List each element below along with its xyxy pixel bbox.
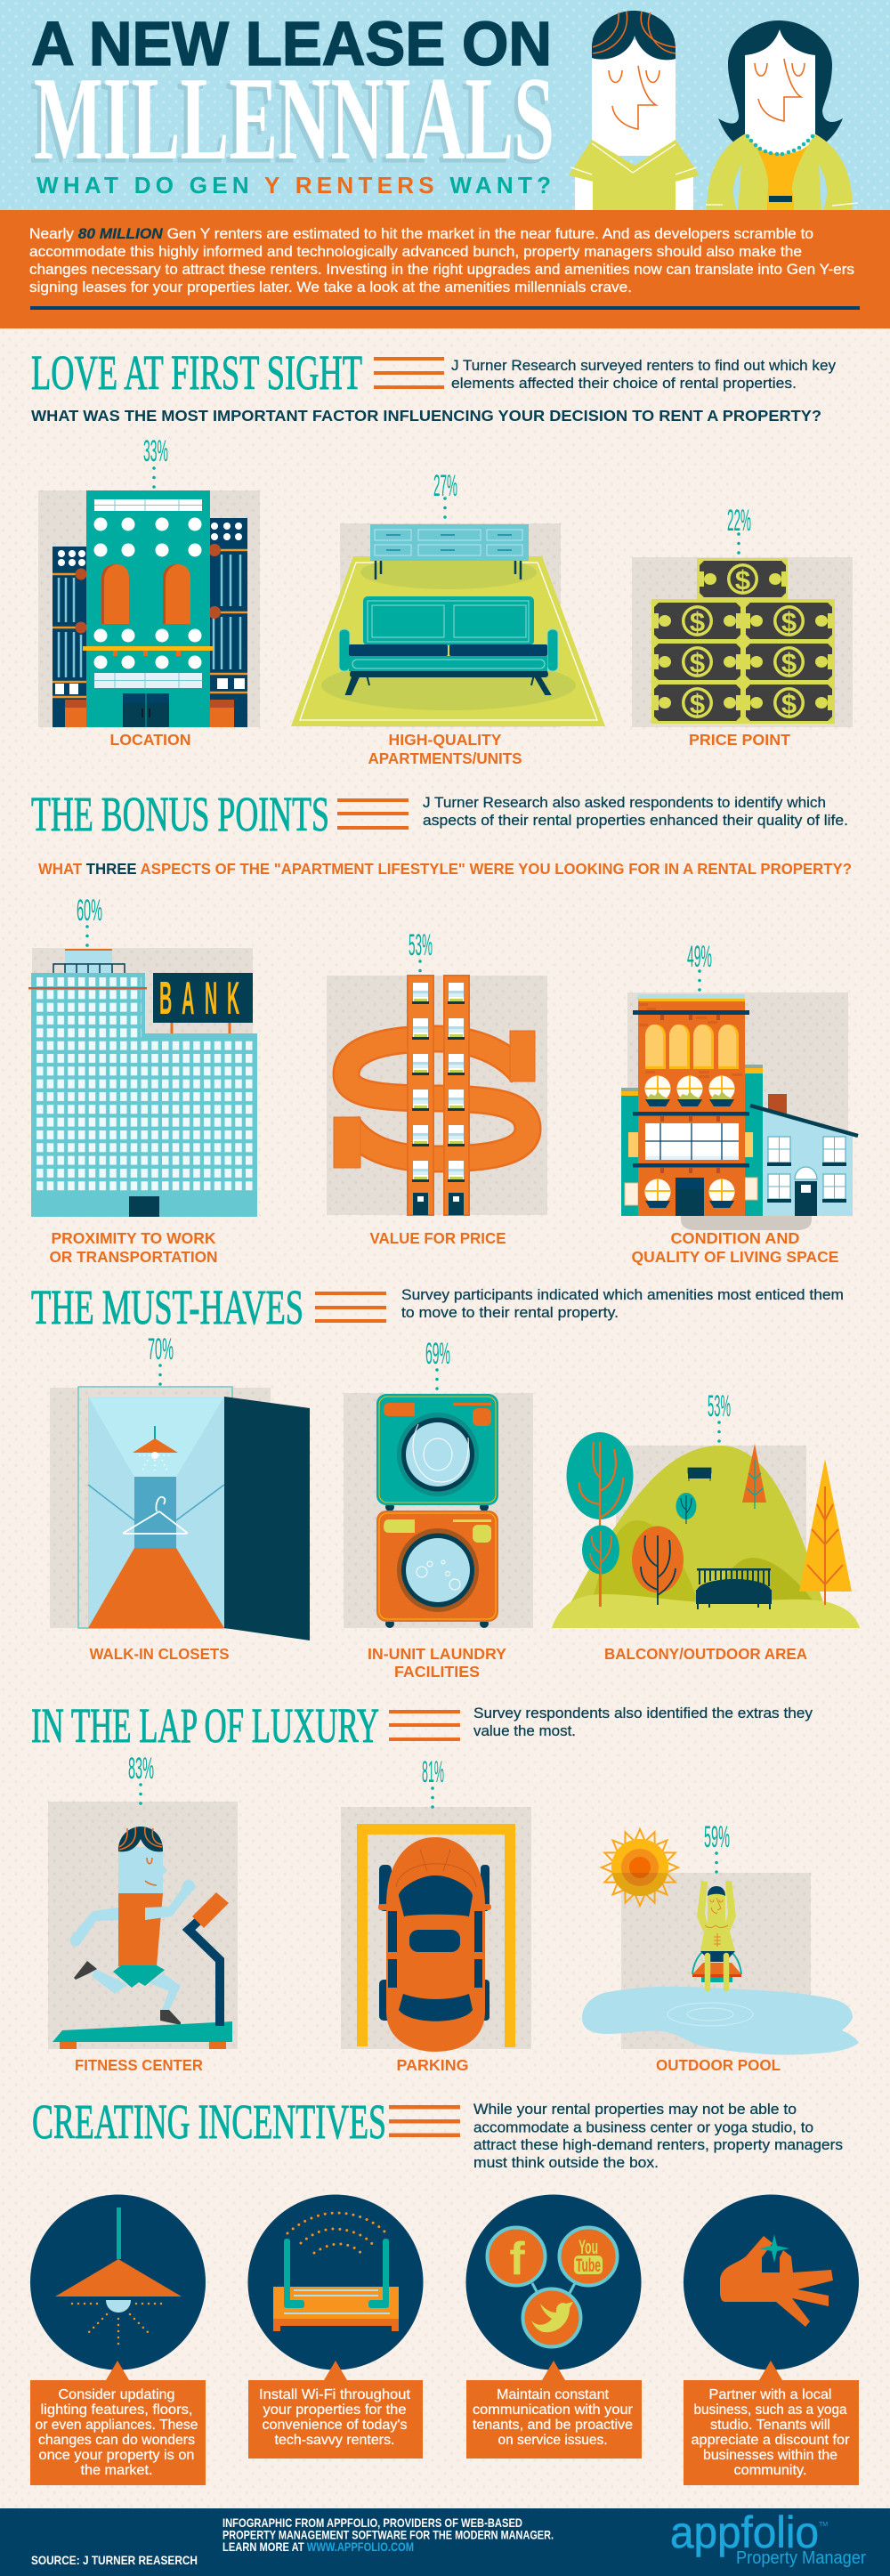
- section intro text: elements affected their choice of rental properties.: [451, 376, 797, 392]
- panel: location: [38, 434, 260, 749]
- label: location: LOCATION: [110, 731, 190, 749]
- card: communication: [466, 2195, 642, 2459]
- card text: communication with your: [473, 2402, 633, 2418]
- section intro text: value the most.: [473, 1723, 576, 1739]
- panel: value for price: [327, 928, 547, 1247]
- label: proximity: OR TRANSPORTATION: [50, 1248, 217, 1266]
- card text: Maintain constant: [497, 2387, 610, 2402]
- panel: in-unit laundry: [344, 1337, 533, 1681]
- label: high-quality apartments/units: APARTMENTS/UNITS: [368, 749, 522, 767]
- illustration: stacks of money: $: [735, 564, 750, 595]
- illustration: rug, dresser and sofa: [291, 524, 605, 726]
- panel: high-quality apartments: [291, 469, 605, 767]
- card text: Consider updating: [59, 2387, 174, 2402]
- percentage: 49%: [687, 940, 712, 991]
- panel: intro: [0, 210, 890, 328]
- illustration: bank building: [28, 949, 257, 1217]
- percentage: 22%: [727, 504, 751, 554]
- panel: value for price: 53%: [409, 928, 433, 962]
- label: value for price: VALUE FOR PRICE: [370, 1229, 506, 1247]
- percentage: 53%: [708, 1389, 731, 1442]
- icon: social networks: Tube: [576, 2256, 601, 2276]
- card text: community.: [733, 2463, 806, 2478]
- card text: tech-savvy renters.: [274, 2433, 395, 2448]
- card: local partnership: [684, 2195, 859, 2485]
- section intro text: accommodate a business center or yoga studio, to: [473, 2120, 813, 2136]
- footer: [0, 2507, 890, 2576]
- illustration: stacked washer and dryer: [376, 1394, 498, 1628]
- label: balcony/outdoor area: BALCONY/OUTDOOR AREA: [604, 1645, 807, 1663]
- section intro text: J Turner Research surveyed renters to find out which key: [451, 358, 837, 374]
- illustration: diver on board: [692, 1881, 741, 1989]
- icon: hand with sparkle: [720, 2234, 833, 2327]
- card text: businesses within the: [703, 2448, 837, 2463]
- illustration: buildings: [53, 490, 247, 727]
- footer credit text: PROPERTY MANAGEMENT SOFTWARE FOR THE MODERN MANAGER.: [222, 2528, 554, 2542]
- title: [30, 9, 554, 198]
- illustration: pool: [582, 1987, 859, 2054]
- card text: [259, 2387, 411, 2448]
- illustration: stacks of money: $: [690, 688, 705, 719]
- illustration: dollar sign tower: [334, 976, 535, 1215]
- illustration: man: [569, 11, 700, 210]
- card text: or even appliances. These: [36, 2418, 198, 2433]
- panel: walk-in closets: 70%: [148, 1333, 174, 1366]
- panel: price point: 22%: [727, 504, 751, 538]
- section intro text: [473, 2102, 843, 2171]
- icon: pendant lamp: [55, 2207, 182, 2350]
- percentage: 70%: [148, 1333, 174, 1385]
- section intro text: While your rental properties may not be able to: [473, 2102, 797, 2118]
- source: SOURCE: J TURNER REASERCH: [31, 2553, 198, 2567]
- title line: millennials: MILLENNIALS: [34, 53, 554, 184]
- question heading: WHAT THREE ASPECTS OF THE "APARTMENT LIFESTYLE" WERE YOU LOOKING FOR IN A RENTAL PROPERTY?: [38, 860, 852, 878]
- panel: outdoor pool: 59%: [704, 1820, 730, 1854]
- panel: balcony/outdoor area: [552, 1389, 860, 1663]
- card text: Partner with a local: [708, 2387, 831, 2402]
- illustration: brick building and house: [621, 994, 858, 1230]
- illustration: sun: [602, 1829, 678, 1906]
- label: fitness center: FITNESS CENTER: [75, 2056, 203, 2074]
- section intro text: aspects of their rental properties enhanced their quality of life.: [423, 813, 848, 829]
- illustration: hills, trees and benches: [552, 1432, 860, 1628]
- label: in-unit laundry facilities: [368, 1645, 506, 1681]
- intro text: [29, 225, 854, 296]
- card text: your properties for the: [263, 2402, 406, 2418]
- section heading: creating incentives: [32, 2094, 843, 2171]
- illustration: stacks of money: $: [781, 688, 797, 719]
- question heading: WHAT WAS THE MOST IMPORTANT FACTOR INFLUENCING YOUR DECISION TO RENT A PROPERTY?: [31, 407, 821, 425]
- section heading: creating incentives: CREATING INCENTIVES: [32, 2094, 386, 2149]
- panel: location: 33%: [143, 434, 168, 468]
- icon: social networks: [488, 2227, 618, 2346]
- card text: business, such as a yoga: [694, 2402, 847, 2418]
- panel: proximity: [28, 894, 257, 1266]
- section intro text: [473, 1705, 813, 1739]
- illustration: stacks of money: $: [781, 606, 797, 637]
- card text: the market.: [80, 2463, 153, 2478]
- card text: changes can do wonders: [38, 2433, 195, 2448]
- card text: tenants, and be proactive: [473, 2418, 633, 2433]
- section intro text: attract these high-demand renters, property managers: [473, 2137, 843, 2153]
- card text: convenience of today's: [262, 2418, 408, 2433]
- percentage: 81%: [422, 1755, 444, 1808]
- logo: appfolio: [670, 2507, 866, 2568]
- section heading: the must-haves: THE MUST-HAVES: [31, 1280, 303, 1334]
- section heading: the must-haves: [31, 1280, 844, 1334]
- panel: condition and quality: [621, 940, 858, 1266]
- card text: appreciate a discount for: [691, 2433, 849, 2448]
- section heading: love at first sight: [31, 345, 837, 400]
- percentage: 60%: [77, 894, 102, 946]
- footer credit text: [222, 2515, 554, 2554]
- section intro text: [401, 1287, 844, 1321]
- panel: parking: [341, 1755, 531, 2074]
- label: price point: PRICE POINT: [689, 731, 790, 749]
- card text: [473, 2387, 633, 2448]
- card text: [691, 2387, 849, 2478]
- footer credit text: LEARN MORE AT WWW.APPFOLIO.COM: [222, 2540, 414, 2554]
- title line: a new lease on: A NEW LEASE ON: [31, 9, 552, 78]
- panel: price point: [632, 504, 853, 749]
- percentage: 27%: [433, 469, 457, 518]
- card text: on service issues.: [498, 2433, 607, 2448]
- illustration: stacks of money: $: [690, 606, 705, 637]
- label: condition and quality of living space: QUALITY OF LIVING SPACE: [632, 1248, 838, 1266]
- percentage: 69%: [425, 1337, 450, 1389]
- illustration: open closet: [78, 1387, 310, 1640]
- illustration: woman: [706, 20, 858, 210]
- intro text: Nearly 80 MILLION Gen Y renters are estimated to hit the market in the near future. And as developers scramble to: [29, 225, 813, 242]
- card text: lighting features, floors,: [41, 2402, 192, 2418]
- logo: appfolio: Property Manager: [736, 2548, 866, 2568]
- label: parking: PARKING: [397, 2056, 468, 2074]
- section intro text: must think outside the box.: [473, 2155, 659, 2171]
- card: lighting: [30, 2195, 206, 2485]
- section intro text: [423, 795, 848, 829]
- illustration: bank building: BANK: [159, 973, 240, 1025]
- intro text: changes necessary to attract these renters. Investing in the right upgrades and amenities now can translate into Gen Y-ers: [29, 261, 854, 278]
- card text: studio. Tenants will: [710, 2418, 830, 2433]
- icon: social networks: You: [578, 2236, 598, 2258]
- label: high-quality apartments/units: [368, 731, 522, 767]
- panel: high-quality apartments: 27%: [433, 469, 457, 503]
- illustration: stacks of money: $: [781, 647, 797, 678]
- card text: once your property is on: [39, 2448, 194, 2463]
- card text: Install Wi-Fi throughout: [259, 2387, 411, 2402]
- intro text: accommodate this highly informed and technologically advanced bunch, property managers should also make the: [29, 243, 802, 260]
- label: in-unit laundry facilities: IN-UNIT LAUNDRY: [368, 1645, 506, 1663]
- panel: fitness center: 83%: [128, 1752, 154, 1786]
- panel: fitness center: [48, 1752, 238, 2074]
- illustration: runner on treadmill: [53, 1827, 232, 2049]
- card text: [36, 2387, 198, 2478]
- percentage: 83%: [128, 1752, 154, 1804]
- icon: wi-fi router: [273, 2213, 399, 2331]
- section intro text: [451, 358, 837, 392]
- panel: walk-in closets: [50, 1333, 310, 1663]
- section heading: in the lap of luxury: IN THE LAP OF LUXURY: [31, 1698, 379, 1753]
- subtitle: WHAT DO GEN Y RENTERS WANT?: [36, 172, 551, 198]
- label: walk-in closets: WALK-IN CLOSETS: [89, 1645, 230, 1663]
- panel: in-unit laundry: 69%: [425, 1337, 450, 1371]
- percentage: 33%: [143, 434, 168, 488]
- illustration: stacks of money: $: [690, 647, 705, 678]
- section intro text: J Turner Research also asked respondents to identify which: [423, 795, 826, 811]
- label: in-unit laundry facilities: FACILITIES: [394, 1663, 480, 1681]
- label: proximity: PROXIMITY TO WORK: [52, 1229, 216, 1247]
- panel: outdoor pool: [582, 1820, 859, 2074]
- section intro text: Survey participants indicated which amenities most enticed them: [401, 1287, 844, 1303]
- logo: appfolio: TM: [819, 2522, 828, 2528]
- label: outdoor pool: OUTDOOR POOL: [656, 2056, 781, 2074]
- card: wi-fi: [247, 2195, 424, 2459]
- title line: millennials: [30, 53, 554, 188]
- logo: appfolio: appfolio: [670, 2507, 819, 2557]
- footer credit text: INFOGRAPHIC FROM APPFOLIO, PROVIDERS OF WEB-BASED: [222, 2515, 522, 2530]
- title line: millennials: MILLENNIALS: [30, 56, 551, 188]
- panel: balcony/outdoor area: 53%: [708, 1389, 731, 1423]
- label: proximity: [50, 1229, 217, 1266]
- section heading: love at first sight: LOVE AT FIRST SIGHT: [31, 345, 362, 400]
- label: condition and quality of living space: [632, 1229, 838, 1266]
- section intro text: to move to their rental property.: [401, 1305, 619, 1321]
- section heading: the bonus points: THE BONUS POINTS: [31, 787, 329, 841]
- label: high-quality apartments/units: HIGH-QUALITY: [388, 731, 502, 749]
- section intro text: Survey respondents also identified the extras they: [473, 1705, 813, 1721]
- illustration: stacks of money: [651, 558, 835, 724]
- illustration: car in garage: [357, 1824, 515, 2052]
- percentage: 59%: [704, 1820, 730, 1873]
- section heading: the bonus points: [31, 787, 848, 841]
- percentage: 53%: [409, 928, 433, 972]
- intro text: signing leases for your properties later. We take a look at the amenities millennials crave.: [29, 279, 632, 296]
- label: condition and quality of living space: CONDITION AND: [671, 1229, 799, 1247]
- panel: proximity: 60%: [77, 894, 102, 928]
- icon: social networks: f: [509, 2233, 525, 2285]
- panel: parking: 81%: [422, 1755, 444, 1789]
- panel: condition and quality: 49%: [687, 940, 712, 974]
